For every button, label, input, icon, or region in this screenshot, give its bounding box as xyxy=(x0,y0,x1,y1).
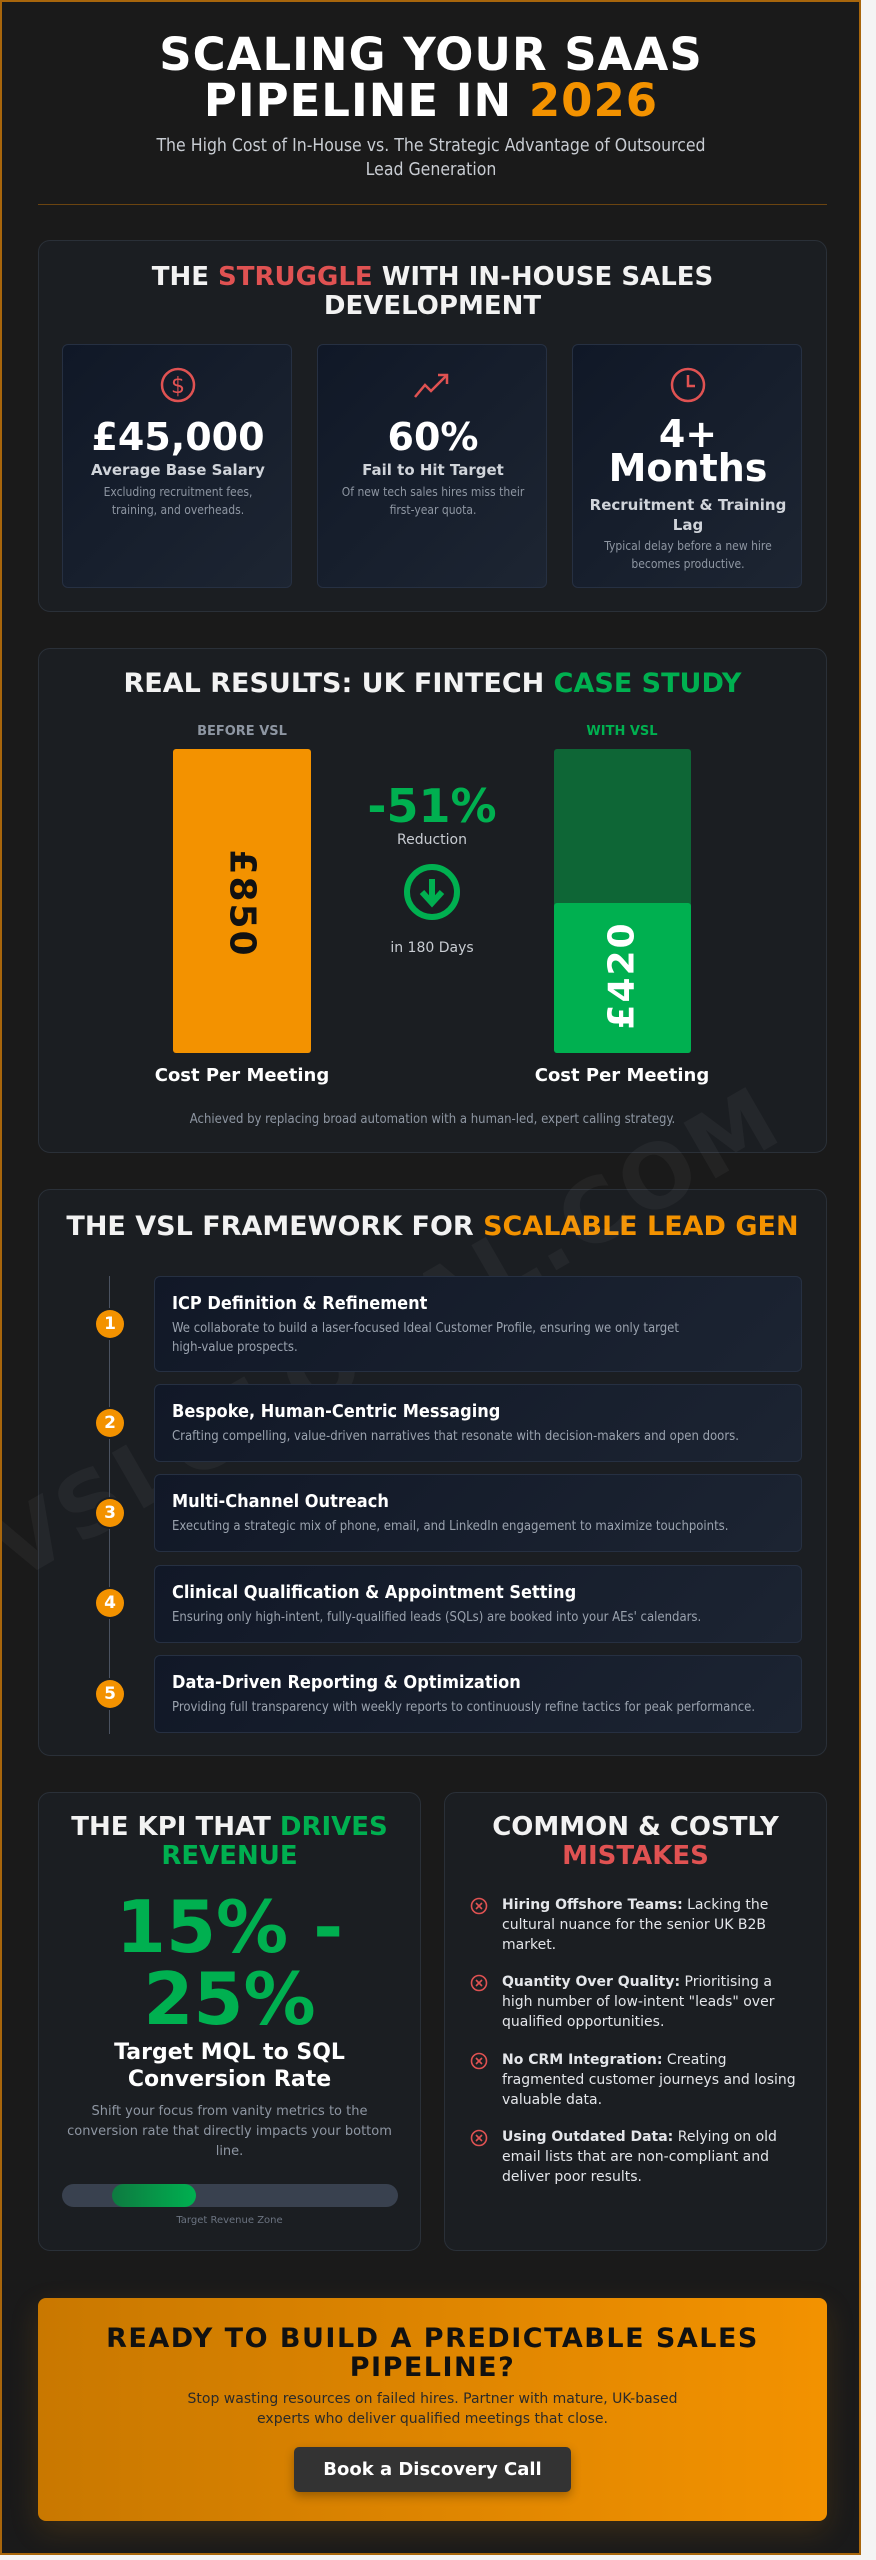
card: salary: £45,000 xyxy=(91,415,265,459)
mistake 4: Using Outdated Data: Relying on old email lists that are non-compliant and deliver poor results. xyxy=(502,2129,777,2185)
marker 5 xyxy=(96,1680,124,1708)
icon: trend xyxy=(414,374,448,398)
heading: struggle: THE STRUGGLE WITH IN-HOUSE SALES xyxy=(152,262,713,292)
CTA heading: PIPELINE? xyxy=(350,2352,515,2383)
heading: mistakes: MISTAKES xyxy=(562,1841,709,1871)
stat: conversion: 25% xyxy=(143,1957,316,2041)
CTA heading xyxy=(106,2323,759,2383)
heading: mistakes: COMMON & COSTLY xyxy=(492,1812,779,1842)
heading: struggle xyxy=(152,262,713,321)
step 1: ICP Definition & Refinement xyxy=(172,1293,427,1314)
panel: KPI: Target Revenue Zone xyxy=(176,2215,283,2226)
stat: reduction: -51% xyxy=(367,779,497,833)
step 3 xyxy=(154,1474,802,1552)
CTA heading: READY TO BUILD A PREDICTABLE SALES xyxy=(106,2323,759,2354)
card: lag xyxy=(572,344,802,588)
card: salary: Average Base Salary xyxy=(91,461,265,479)
heading: struggle: DEVELOPMENT xyxy=(324,291,541,321)
panel: framework xyxy=(38,1189,827,1756)
card: fail rate: Fail to Hit Target xyxy=(362,461,504,479)
card: lag: Typical delay before a new hire becomes productive. xyxy=(604,539,772,571)
step 2: Bespoke, Human-Centric Messaging xyxy=(172,1401,500,1422)
bar: before: £850 xyxy=(222,849,262,958)
bar: with: £420 xyxy=(602,921,642,1030)
title: SCALING YOUR SAAS xyxy=(159,28,703,81)
panel: struggle xyxy=(38,240,827,612)
title xyxy=(159,28,703,127)
card: lag: Months xyxy=(609,446,767,490)
step 5 xyxy=(154,1655,802,1733)
CTA button xyxy=(294,2447,571,2492)
mistake 1: Hiring Offshore Teams: Lacking the cultural nuance for the senior UK B2B market. xyxy=(502,1897,768,1953)
panel: case study xyxy=(38,648,827,1153)
step 1: We collaborate to build a laser-focused Ideal Customer Profile, ensuring we only target high-value prospects. xyxy=(172,1321,679,1355)
panel: KPI xyxy=(38,1792,421,2251)
bar: before xyxy=(173,749,311,1053)
stat: conversion xyxy=(116,1885,343,2041)
card: lag: Recruitment & Training Lag xyxy=(590,496,786,534)
marker 3: 3 xyxy=(104,1503,116,1523)
subtitle: The High Cost of In-House vs. The Strategic Advantage of Outsourced xyxy=(156,136,706,156)
step 1 xyxy=(154,1276,802,1372)
marker 4: 4 xyxy=(104,1593,116,1613)
subtitle xyxy=(156,136,706,180)
card: salary: Excluding recruitment fees, training, and overheads. xyxy=(104,485,252,517)
card: fail rate: 60% xyxy=(388,415,478,459)
label: before: BEFORE VSL xyxy=(197,724,287,739)
subtitle: Lead Generation xyxy=(366,160,496,180)
marker 1: 1 xyxy=(104,1314,116,1334)
progress bar xyxy=(62,2184,398,2207)
card: salary xyxy=(62,344,292,588)
caption: Achieved by replacing broad automation with a human-led, expert calling strategy. xyxy=(190,1112,675,1127)
step 4: Ensuring only high-intent, fully-qualified leads (SQLs) are booked into your AEs' calendars. xyxy=(172,1610,701,1625)
step 3: Multi-Channel Outreach xyxy=(172,1491,389,1512)
CTA button: Book a Discovery Call xyxy=(323,2459,542,2480)
card: fail rate xyxy=(317,344,547,588)
text: Cost Per Meeting xyxy=(535,1065,709,1086)
marker 3 xyxy=(96,1499,124,1527)
marker 2 xyxy=(96,1409,124,1437)
labels: cost per meeting: Cost Per Meeting xyxy=(155,1065,329,1086)
icon: clock xyxy=(670,368,706,402)
label: with: WITH VSL xyxy=(586,724,658,739)
heading: framework: THE VSL FRAMEWORK FOR SCALABLE LEAD GEN xyxy=(66,1211,799,1242)
heading: mistakes xyxy=(492,1812,779,1871)
title: PIPELINE IN 2026 xyxy=(204,74,658,127)
card: lag: 4+ xyxy=(659,412,717,456)
text: days: in 180 Days xyxy=(390,940,474,956)
step 5: Data-Driven Reporting & Optimization xyxy=(172,1672,521,1693)
CTA panel xyxy=(38,2298,827,2521)
heading: case study: REAL RESULTS: UK FINTECH CASE STUDY xyxy=(124,668,741,699)
icon: dollar: $ xyxy=(171,374,185,399)
CTA text: Stop wasting resources on failed hires. Partner with mature, UK-based experts who deliver qualified meetings that close. xyxy=(188,2391,677,2427)
mistake 2: Quantity Over Quality: Prioritising a high number of low-intent "leads" over qualified opportunities. xyxy=(502,1974,774,2030)
marker 4 xyxy=(96,1589,124,1617)
step 4: Clinical Qualification & Appointment Setting xyxy=(172,1582,576,1603)
marker 2: 2 xyxy=(104,1413,116,1433)
icon: dollar xyxy=(160,368,196,402)
step 2 xyxy=(154,1384,802,1462)
bar: with xyxy=(554,749,691,1053)
heading: KPI: REVENUE xyxy=(161,1841,298,1871)
icon: down arrow xyxy=(404,864,460,920)
step 4 xyxy=(154,1565,802,1643)
panel: mistakes xyxy=(444,1792,827,2251)
step 3: Executing a strategic mix of phone, email, and LinkedIn engagement to maximize touchpoints. xyxy=(172,1519,728,1534)
heading: KPI xyxy=(71,1812,388,1871)
stat: conversion: 15% - xyxy=(116,1885,343,1969)
step 2: Crafting compelling, value-driven narratives that resonate with decision-makers and open doors. xyxy=(172,1429,739,1444)
stat: reduction: Reduction xyxy=(397,832,467,848)
mistake 3: No CRM Integration: Creating fragmented customer journeys and losing valuable data. xyxy=(502,2052,796,2108)
marker 1 xyxy=(96,1310,124,1338)
heading: KPI: THE KPI THAT DRIVES xyxy=(71,1812,388,1842)
panel: KPI: Shift your focus from vanity metrics to the conversion rate that directly impacts your bottom line. xyxy=(67,2104,392,2159)
panel: KPI: Target MQL to SQL xyxy=(114,2040,345,2065)
step 5: Providing full transparency with weekly reports to continuously refine tactics for peak performance. xyxy=(172,1700,755,1715)
card: fail rate: Of new tech sales hires miss their first-year quota. xyxy=(342,485,524,517)
marker 5: 5 xyxy=(104,1684,116,1704)
panel: KPI: Conversion Rate xyxy=(128,2067,331,2092)
